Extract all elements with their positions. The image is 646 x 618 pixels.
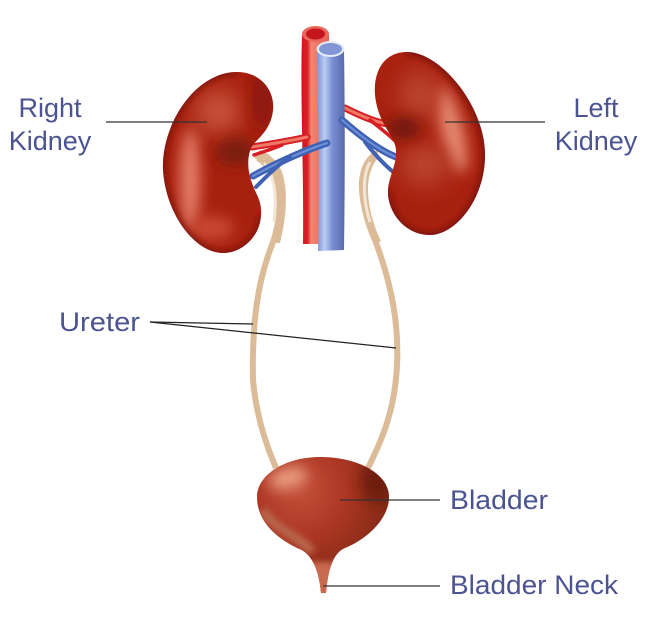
right kidney: [162, 72, 274, 253]
label: left kidney: Left: [573, 93, 619, 123]
label: right kidney: Kidney: [9, 126, 92, 156]
aorta: [301, 26, 329, 244]
renal veins: [253, 120, 396, 187]
label: right kidney: Right: [18, 93, 82, 123]
ureters: [253, 150, 397, 468]
leader lines: ureter: [150, 322, 396, 348]
label: left kidney: Kidney: [555, 126, 638, 156]
renal arteries: [252, 108, 396, 155]
label: bladder: Bladder: [450, 485, 548, 515]
vena cava: [316, 41, 345, 251]
bladder: [257, 457, 389, 593]
label: bladder neck: Bladder Neck: [450, 570, 619, 600]
leader line: left kidney: [445, 121, 545, 123]
leader line: bladder: [340, 499, 440, 501]
label: ureter: Ureter: [59, 307, 140, 337]
leader line: right kidney: [106, 121, 207, 123]
leader line: bladder neck: [323, 585, 440, 587]
left kidney: [374, 52, 485, 235]
